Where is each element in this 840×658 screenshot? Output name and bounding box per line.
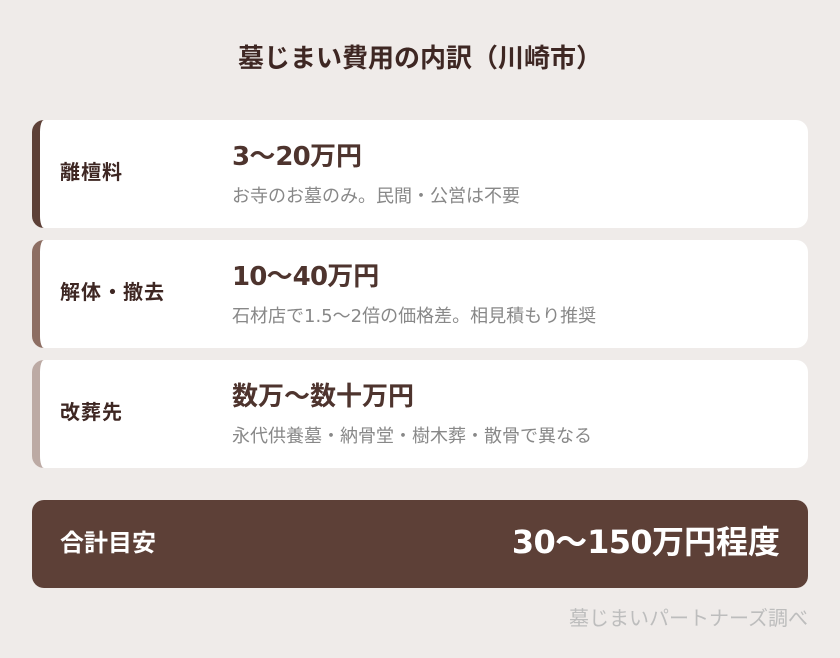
panel: 解体・撤去 [32, 240, 808, 348]
value: 10〜40万円: 10〜40万円 [232, 262, 379, 292]
panel: 離檀料 [32, 120, 808, 228]
label: 改葬先: 改葬先 [60, 400, 123, 424]
note: ・ [466, 422, 484, 448]
source note: 墓じまいパートナーズ調べ [569, 606, 808, 630]
label: 解体・撤去: 解体 撤去 [60, 280, 165, 304]
note: お寺のお墓のみ。民間 公営は不要 [232, 186, 520, 207]
note: 永代供養墓 納骨堂 樹木葬 散骨で異なる [232, 426, 592, 447]
note: 石材店で1.5〜2倍の価格差。相見積もり推奨 [232, 306, 596, 327]
note: ・ [412, 182, 430, 208]
panel: 改葬先 [32, 360, 808, 468]
label: 解体・撤去: ・ [102, 276, 122, 305]
note: ・ [322, 422, 340, 448]
value: 3〜20万円: 3〜20万円 [232, 142, 362, 172]
value: 数万〜数十万円: 数万〜数十万円 [232, 382, 414, 412]
panel: total [32, 500, 808, 588]
title: 墓じまい費用の内訳（川崎市） [238, 44, 602, 74]
note: ・ [394, 422, 412, 448]
total value: 30〜150万円程度 [512, 523, 780, 561]
label: 離檀料: 離檀料 [60, 160, 123, 184]
total label: 合計目安 [60, 529, 156, 557]
